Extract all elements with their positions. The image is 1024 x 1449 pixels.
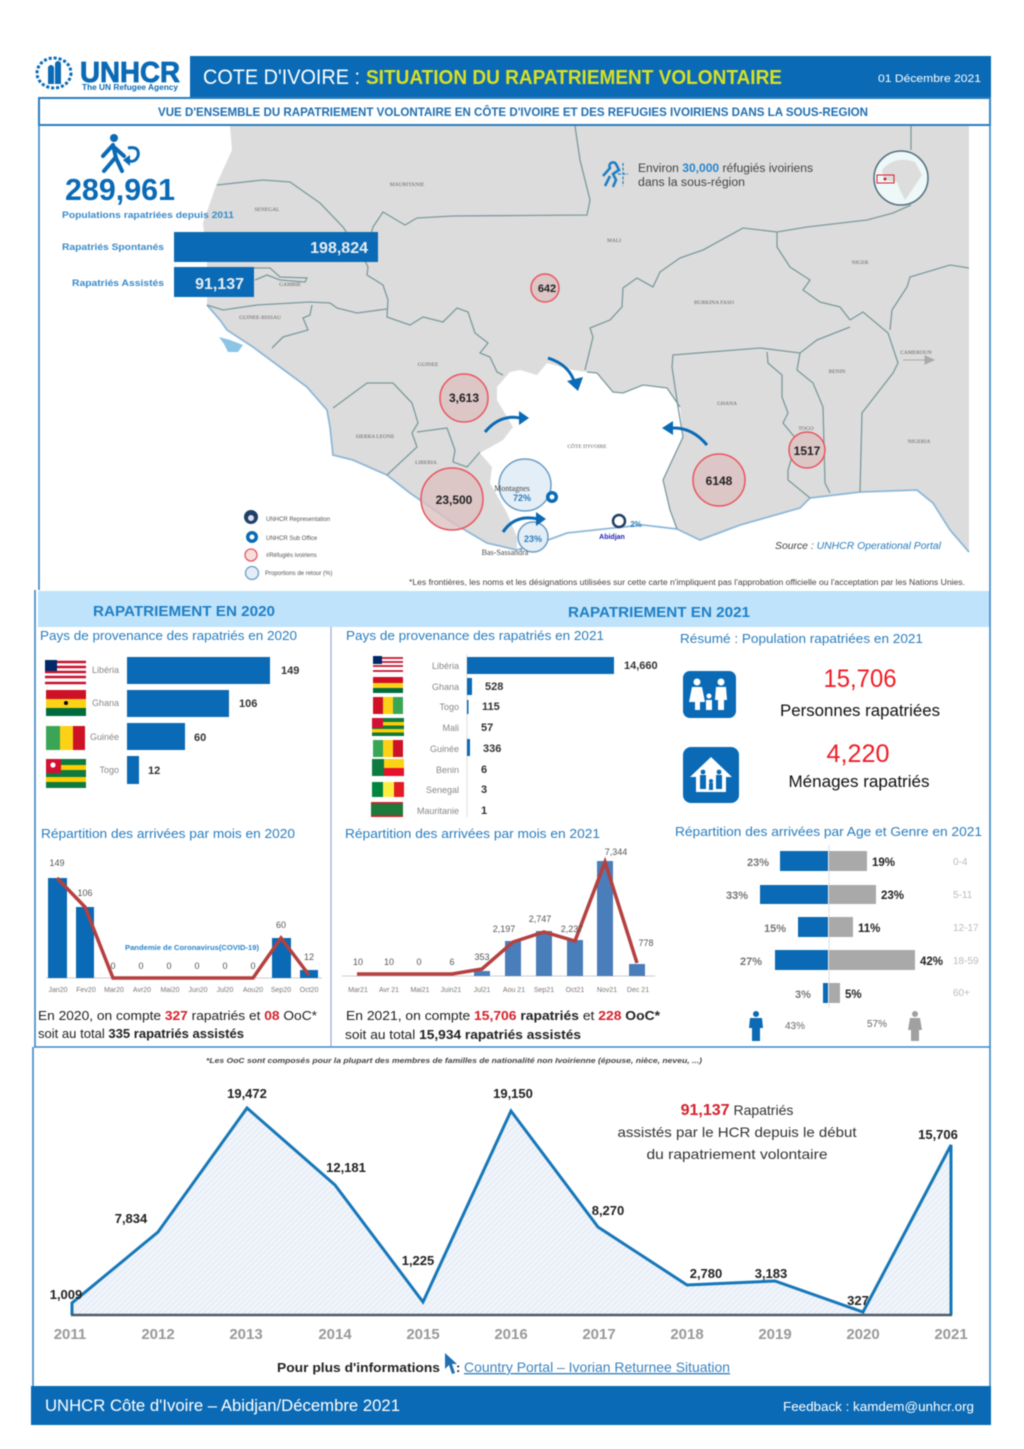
- flag: Guinea: [46, 726, 85, 750]
- bars 2021: 3: [481, 784, 487, 796]
- header banner: 01 Décembre 2021: [878, 73, 981, 85]
- area chart: returns per year: 2019: [758, 1326, 792, 1343]
- panel: monthly arrivals 2020: [38, 826, 322, 1041]
- bar: assisted: [72, 267, 254, 297]
- panel: age and gender pyramid: 5%: [845, 989, 862, 1001]
- country labels: [239, 182, 932, 466]
- office markers: [546, 491, 625, 527]
- more information link: Country Portal – Ivorian Returnee Situation: [464, 1359, 730, 1375]
- bar chart 2021: 778: [638, 938, 654, 948]
- bars 2020: 12: [148, 765, 160, 777]
- area chart: returns per year: 8,270: [592, 1203, 624, 1218]
- footnote OoC: *Les OoC sont composés pour la plupart des membres de familles de nationalité non Ivoirienne (épouse, nièce, neveu, ...): [206, 1056, 703, 1065]
- bar chart 2020: Mai20: [160, 987, 180, 994]
- bar chart 2021: 2,197: [493, 924, 515, 934]
- return circles: 72%: [513, 493, 531, 503]
- refugee circles: 3,613: [449, 391, 479, 405]
- country labels: GHANA: [717, 401, 737, 407]
- bar chart 2020: 60: [276, 920, 286, 930]
- bars 2021: Togo: [439, 702, 459, 712]
- header banner: COTE D'IVOIRE :: [203, 66, 360, 89]
- refugee circles: 1517: [794, 444, 821, 458]
- bar chart 2020: Jul20: [217, 987, 233, 994]
- bars 2020: [90, 657, 299, 784]
- more information link: [277, 1353, 730, 1375]
- area chart: returns per year: 2015: [406, 1326, 440, 1343]
- note 2021: En 2021, on compte 15,706 rapatriés et 228 OoC*: [346, 1008, 661, 1023]
- country labels: NIGERIA: [908, 439, 930, 445]
- area chart: returns per year: 15,706: [918, 1127, 958, 1142]
- footer: Feedback : kamdem@unhcr.org: [783, 1399, 974, 1414]
- bar chart 2020: 0: [222, 961, 228, 971]
- bar chart 2021: 10: [353, 957, 363, 967]
- refugee circles: [421, 274, 825, 530]
- panel: age and gender pyramid: 19%: [872, 857, 895, 869]
- section band: [38, 591, 990, 627]
- area chart: returns per year: 2016: [494, 1326, 528, 1343]
- bar chart 2020: [46, 858, 322, 994]
- panel: age and gender pyramid: 33%: [726, 890, 748, 902]
- arrow to Cameroon: [903, 356, 934, 364]
- panel: monthly arrivals 2021: Répartition des arrivées par mois en 2021: [345, 826, 600, 841]
- frame lines: [34, 98, 990, 1047]
- panel: 2020 origin countries: Pays de provenance des rapatriés en 2020: [40, 628, 297, 643]
- footer: UNHCR Côte d'Ivoire – Abidjan/Décembre 2021: [45, 1396, 400, 1415]
- country labels: SIERRA LEONE: [356, 434, 395, 440]
- bar: spontaneous: Rapatriés Spontanés: [62, 242, 164, 253]
- return circles: Bas-Sassandra: [482, 548, 529, 557]
- bar chart 2021: Jul21: [474, 987, 490, 994]
- bar chart 2021: Dec 21: [627, 987, 649, 994]
- key figures panel: [62, 134, 378, 297]
- legend: #Réfugiés ivoiriens: [266, 553, 317, 559]
- panel: age and gender pyramid: 12-17: [953, 923, 979, 934]
- area chart: returns per year: 1,225: [402, 1253, 434, 1268]
- bar: spontaneous: 198,824: [310, 240, 368, 257]
- area chart: returns per year: 327: [847, 1293, 869, 1308]
- logo: UNHCR: The UN Refugee Agency: [82, 83, 179, 92]
- country labels: GAMBIE: [279, 282, 301, 288]
- bar chart 2021: 7,344: [605, 847, 627, 857]
- area chart: returns per year: 2017: [582, 1326, 616, 1343]
- callout: assisted total: 91,137 Rapatriés: [681, 1102, 793, 1119]
- note 2020: En 2020, on compte 327 rapatriés et 08 OoC*: [38, 1008, 317, 1023]
- panel: age and gender pyramid: 18-59: [953, 956, 979, 967]
- return circles: Abidjan: [599, 534, 625, 541]
- subtitle bar: VUE D'ENSEMBLE DU RAPATRIEMENT VOLONTAIRE EN CÔTE D'IVOIRE ET DES REFUGIES IVOIRIENS DANS LA SOUS-REGION: [158, 106, 868, 119]
- bar chart 2021: 2,237: [561, 924, 583, 934]
- bar chart 2020: Aou20: [243, 987, 263, 994]
- panel: summary 2021: 15,706: [824, 665, 896, 693]
- bars 2021: 1: [481, 805, 487, 817]
- bars 2021: Ghana: [432, 682, 459, 692]
- bar chart 2020: Fev20: [76, 987, 96, 994]
- country labels: GUINEE-BISSAU: [239, 315, 281, 321]
- bar chart 2021: Aou 21: [503, 987, 525, 994]
- country labels: CÔTE D'IVOIRE: [567, 442, 607, 450]
- return circles: 23%: [524, 534, 542, 544]
- bars 2020: Togo: [99, 765, 119, 775]
- bar chart 2021: Mai21: [410, 987, 430, 994]
- panel: age and gender pyramid: 60+: [953, 988, 970, 999]
- icon: household: [683, 747, 739, 803]
- bars 2021: [417, 654, 658, 817]
- bar chart 2020: Jan20: [48, 987, 68, 994]
- refugee circles: 6148: [706, 474, 733, 488]
- panel: summary 2021: Ménages rapatriés: [788, 773, 930, 791]
- legend: [244, 510, 332, 580]
- area chart: returns per year: 2012: [141, 1326, 175, 1343]
- refugee circles: 23,500: [436, 493, 473, 507]
- callout: assisted total: assistés par le HCR depuis le début: [618, 1124, 857, 1140]
- key figures panel: Populations rapatriées depuis 2011: [62, 210, 235, 221]
- bar chart 2020: 0: [194, 961, 200, 971]
- area chart: returns per year: 2018: [670, 1326, 704, 1343]
- source: Source : UNHCR Operational Portal: [775, 541, 942, 552]
- footer: [31, 1386, 991, 1425]
- icon: returning person: [103, 134, 138, 171]
- flags 2021: [371, 656, 404, 817]
- logo: UNHCR: [37, 57, 180, 92]
- icon: female: [908, 1011, 922, 1041]
- disclaimer: *Les frontières, les noms et les désignations utilisées sur cette carte n'impliquent pas l'approbation officielle ou l'acceptation par les Nations Unies.: [409, 578, 965, 587]
- panel: 2021 origin countries: [346, 628, 658, 817]
- country labels: BURKINA FASO: [694, 300, 734, 306]
- area chart: returns per year: 2014: [318, 1326, 352, 1343]
- bar chart 2021: Nov21: [597, 987, 617, 994]
- bar chart 2021: Sep21: [534, 987, 554, 994]
- bar chart 2020: 0: [166, 961, 172, 971]
- bars 2021: 336: [483, 743, 501, 755]
- area chart: returns per year: [50, 1086, 968, 1343]
- bar chart 2020: Oct20: [300, 987, 318, 994]
- bar: assisted: Rapatriés Assistés: [72, 278, 164, 289]
- panel: monthly arrivals 2021: [342, 826, 661, 1042]
- return circles: [482, 459, 642, 557]
- bar chart 2020: Jun20: [188, 987, 208, 994]
- panel: monthly arrivals 2020: Répartition des arrivées par mois en 2020: [41, 826, 295, 841]
- header banner: [190, 56, 991, 97]
- area chart: returns per year: 19,150: [493, 1086, 533, 1101]
- bar: assisted: 91,137: [195, 276, 244, 293]
- panel: age and gender pyramid: 15%: [764, 923, 786, 935]
- bar chart 2020: 149: [49, 858, 65, 868]
- legend: UNHCR Sub Office: [266, 536, 318, 542]
- refugee note: dans la sous-région: [638, 177, 745, 189]
- area chart: returns per year: 2020: [846, 1326, 880, 1343]
- panel: age and gender pyramid: 3%: [795, 989, 811, 1001]
- legend: UNHCR Representation: [266, 517, 330, 523]
- panel: age and gender pyramid: 0-4: [953, 857, 968, 868]
- country labels: CAMEROUN: [900, 350, 932, 356]
- bar chart 2021: Avr 21: [379, 987, 399, 994]
- bars 2021: 115: [482, 701, 500, 713]
- bars 2021: 14,660: [624, 660, 658, 672]
- country labels: TOGO: [798, 426, 814, 432]
- flag: Liberia: [45, 660, 86, 685]
- panel: summary 2021: [680, 631, 940, 803]
- bars 2021: Benin: [436, 765, 459, 775]
- bar chart 2021: 2,747: [529, 914, 551, 924]
- bar chart 2021: Mar21: [348, 987, 368, 994]
- bar chart 2020: Pandemie de Coronavirus(COVID-19): [125, 943, 259, 952]
- country labels: BENIN: [829, 369, 845, 375]
- bar chart 2020: Sep20: [271, 987, 291, 994]
- area chart: returns per year: 2021: [934, 1326, 968, 1343]
- bar chart 2021: 353: [474, 952, 490, 962]
- bar chart 2020: 106: [77, 888, 93, 898]
- area chart: returns per year: 1,009: [50, 1287, 82, 1302]
- refugee note: Environ 30,000 réfugiés ivoiriens: [638, 163, 813, 175]
- bar chart 2020: 12: [304, 952, 314, 962]
- panel: age and gender pyramid: 57%: [867, 1019, 887, 1030]
- note 2021: soit au total 15,934 rapatriés assistés: [345, 1027, 581, 1042]
- refugee circles: 642: [538, 283, 556, 295]
- return circles: 2%: [630, 520, 642, 529]
- panel: age and gender pyramid: 23%: [881, 890, 904, 902]
- bars 2021: Mauritanie: [417, 806, 459, 816]
- more information link: :: [456, 1360, 460, 1375]
- bar chart 2020: 0: [250, 961, 256, 971]
- panel: 2021 origin countries: Pays de provenance des rapatriés en 2021: [346, 628, 604, 643]
- bars 2021: 6: [481, 764, 487, 776]
- panel: age and gender pyramid: 5-11: [953, 890, 973, 901]
- bars 2021: Libéria: [432, 661, 459, 671]
- note 2020: soit au total 335 rapatriés assistés: [38, 1026, 244, 1041]
- panel: age and gender pyramid: 43%: [785, 1021, 805, 1032]
- total returnees: 289,961: [65, 172, 175, 207]
- area chart: returns per year: 7,834: [115, 1211, 148, 1226]
- header banner: SITUATION DU RAPATRIEMENT VOLONTAIRE: [366, 67, 782, 89]
- bars 2021: Mali: [442, 723, 459, 733]
- area chart: returns per year: 2,780: [690, 1266, 722, 1281]
- bars 2020: Guinée: [90, 732, 119, 742]
- panel: summary 2021: Personnes rapatriées: [780, 702, 940, 720]
- bars 2021: Senegal: [426, 785, 459, 795]
- country labels: LIBERIA: [415, 460, 437, 466]
- bars 2021: 528: [485, 681, 503, 693]
- flag: Togo: [46, 759, 86, 788]
- area chart: returns per year: 12,181: [326, 1160, 366, 1175]
- bars 2020: 149: [281, 665, 299, 677]
- bar chart 2021: [342, 847, 655, 994]
- more information link: Pour plus d'informations: [277, 1360, 440, 1375]
- bars 2021: Guinée: [430, 744, 459, 754]
- islands: [219, 337, 243, 352]
- panel: summary 2021: Résumé : Population rapatriées en 2021: [680, 631, 923, 646]
- country labels: MALI: [607, 238, 621, 244]
- country labels: SENEGAL: [254, 207, 280, 213]
- panel: age and gender pyramid: [675, 824, 982, 1041]
- panel: 2020 origin countries: [40, 628, 299, 788]
- panel: age and gender pyramid: 42%: [920, 956, 943, 968]
- section band: RAPATRIEMENT EN 2021: [568, 604, 750, 621]
- flag: Ghana: [46, 690, 86, 716]
- panel: summary 2021: 4,220: [826, 740, 890, 768]
- return circles: Montagnes: [494, 484, 530, 493]
- country borders: [207, 126, 969, 529]
- subtitle bar: [39, 98, 990, 125]
- bar chart 2020: Avr20: [133, 987, 151, 994]
- note 2020: [38, 1008, 317, 1041]
- bar chart 2021: 10: [384, 957, 394, 967]
- icon: family: [683, 671, 736, 718]
- callout: assisted total: [618, 1102, 857, 1162]
- refugee note: [603, 162, 813, 189]
- area chart: returns per year: 2011: [54, 1326, 86, 1343]
- area chart: returns per year: 3,183: [755, 1266, 787, 1281]
- bar chart 2020: Mar20: [104, 987, 124, 994]
- bar chart 2021: 0: [416, 957, 422, 967]
- panel: age and gender pyramid: 27%: [740, 956, 762, 968]
- country labels: NIGER: [852, 260, 869, 266]
- icon: male: [749, 1011, 763, 1041]
- flow arrows: [485, 358, 707, 532]
- area chart: returns per year: 2013: [229, 1326, 263, 1343]
- bar chart 2020: 0: [138, 961, 144, 971]
- locator globe: [874, 151, 928, 205]
- country labels: MAURITANIE: [390, 182, 425, 188]
- note 2021: [345, 1008, 661, 1042]
- bars 2020: 106: [239, 698, 257, 710]
- panel: age and gender pyramid: Répartition des arrivées par Age et Genre en 2021: [675, 824, 982, 839]
- bar chart 2020: 0: [110, 961, 116, 971]
- bar chart 2021: 6: [449, 957, 455, 967]
- legend: Proportions de retour (%): [265, 571, 332, 577]
- bar chart 2021: Oct21: [566, 987, 584, 994]
- panel: map of West Africa: [203, 126, 969, 587]
- country labels: GUINEE: [418, 362, 439, 368]
- coast line: [207, 305, 969, 552]
- bar chart 2021: Juin21: [441, 987, 461, 994]
- panel: age and gender pyramid: 11%: [858, 923, 880, 935]
- bars 2020: 60: [194, 732, 206, 744]
- bars 2020: Libéria: [92, 665, 119, 675]
- section band: RAPATRIEMENT EN 2020: [93, 603, 275, 620]
- area chart: returns per year: 19,472: [227, 1086, 267, 1101]
- land mass: [203, 126, 969, 552]
- logo: UNHCR: UNHCR: [80, 57, 180, 89]
- bars 2020: Ghana: [92, 698, 119, 708]
- bar: spontaneous: [62, 232, 378, 262]
- panel: age and gender pyramid: 23%: [747, 857, 769, 869]
- callout: assisted total: du rapatriement volontaire: [646, 1146, 828, 1162]
- bars 2021: 57: [481, 722, 493, 734]
